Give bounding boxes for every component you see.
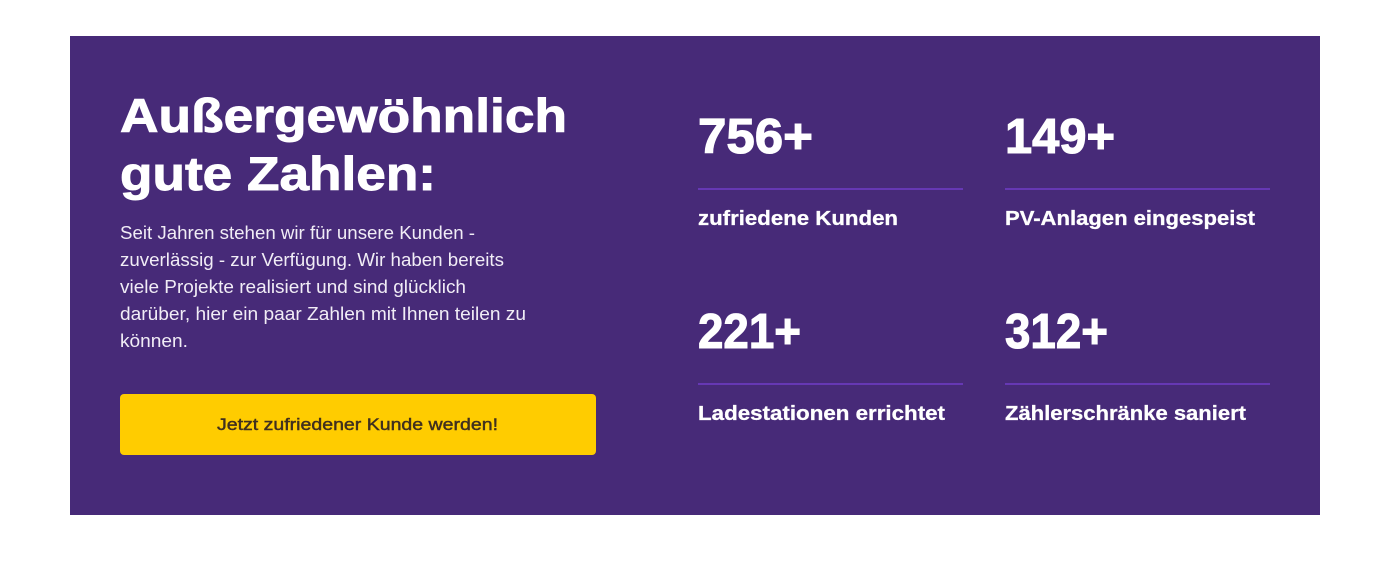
stat: satisfied customers: 756+: [698, 110, 813, 164]
heading: [120, 89, 567, 200]
button: call to action: [120, 394, 596, 455]
text block: introduction: zuverlässig - zur Verfügung. Wir haben bereits: [120, 250, 504, 270]
stat: satisfied customers: [698, 110, 963, 230]
heading: gute Zahlen:: [120, 147, 436, 200]
stat: charging stations: Ladestationen errichtet: [698, 403, 945, 425]
stat: PV systems: PV-Anlagen eingespeist: [1005, 208, 1255, 230]
stat: meter cabinets: [1005, 305, 1270, 425]
stat: charging stations: 221+: [698, 305, 801, 359]
text block: introduction: [120, 223, 526, 351]
stat: charging stations: [698, 305, 963, 425]
text block: introduction: Seit Jahren stehen wir für unsere Kunden -: [120, 223, 475, 243]
stat: satisfied customers: zufriedene Kunden: [698, 208, 898, 230]
panel: statistics banner: [70, 36, 1320, 515]
text block: introduction: viele Projekte realisiert und sind glücklich: [120, 277, 466, 297]
button: call to action: Jetzt zufriedener Kunde werden!: [217, 415, 498, 434]
stat: meter cabinets: 312+: [1005, 305, 1108, 359]
stat: PV systems: 149+: [1005, 110, 1115, 164]
stat: meter cabinets: Zählerschränke saniert: [1005, 403, 1246, 425]
heading: Außergewöhnlich: [120, 89, 567, 142]
text block: introduction: können.: [120, 331, 188, 351]
stat: PV systems: [1005, 110, 1270, 230]
text block: introduction: darüber, hier ein paar Zahlen mit Ihnen teilen zu: [120, 304, 526, 324]
